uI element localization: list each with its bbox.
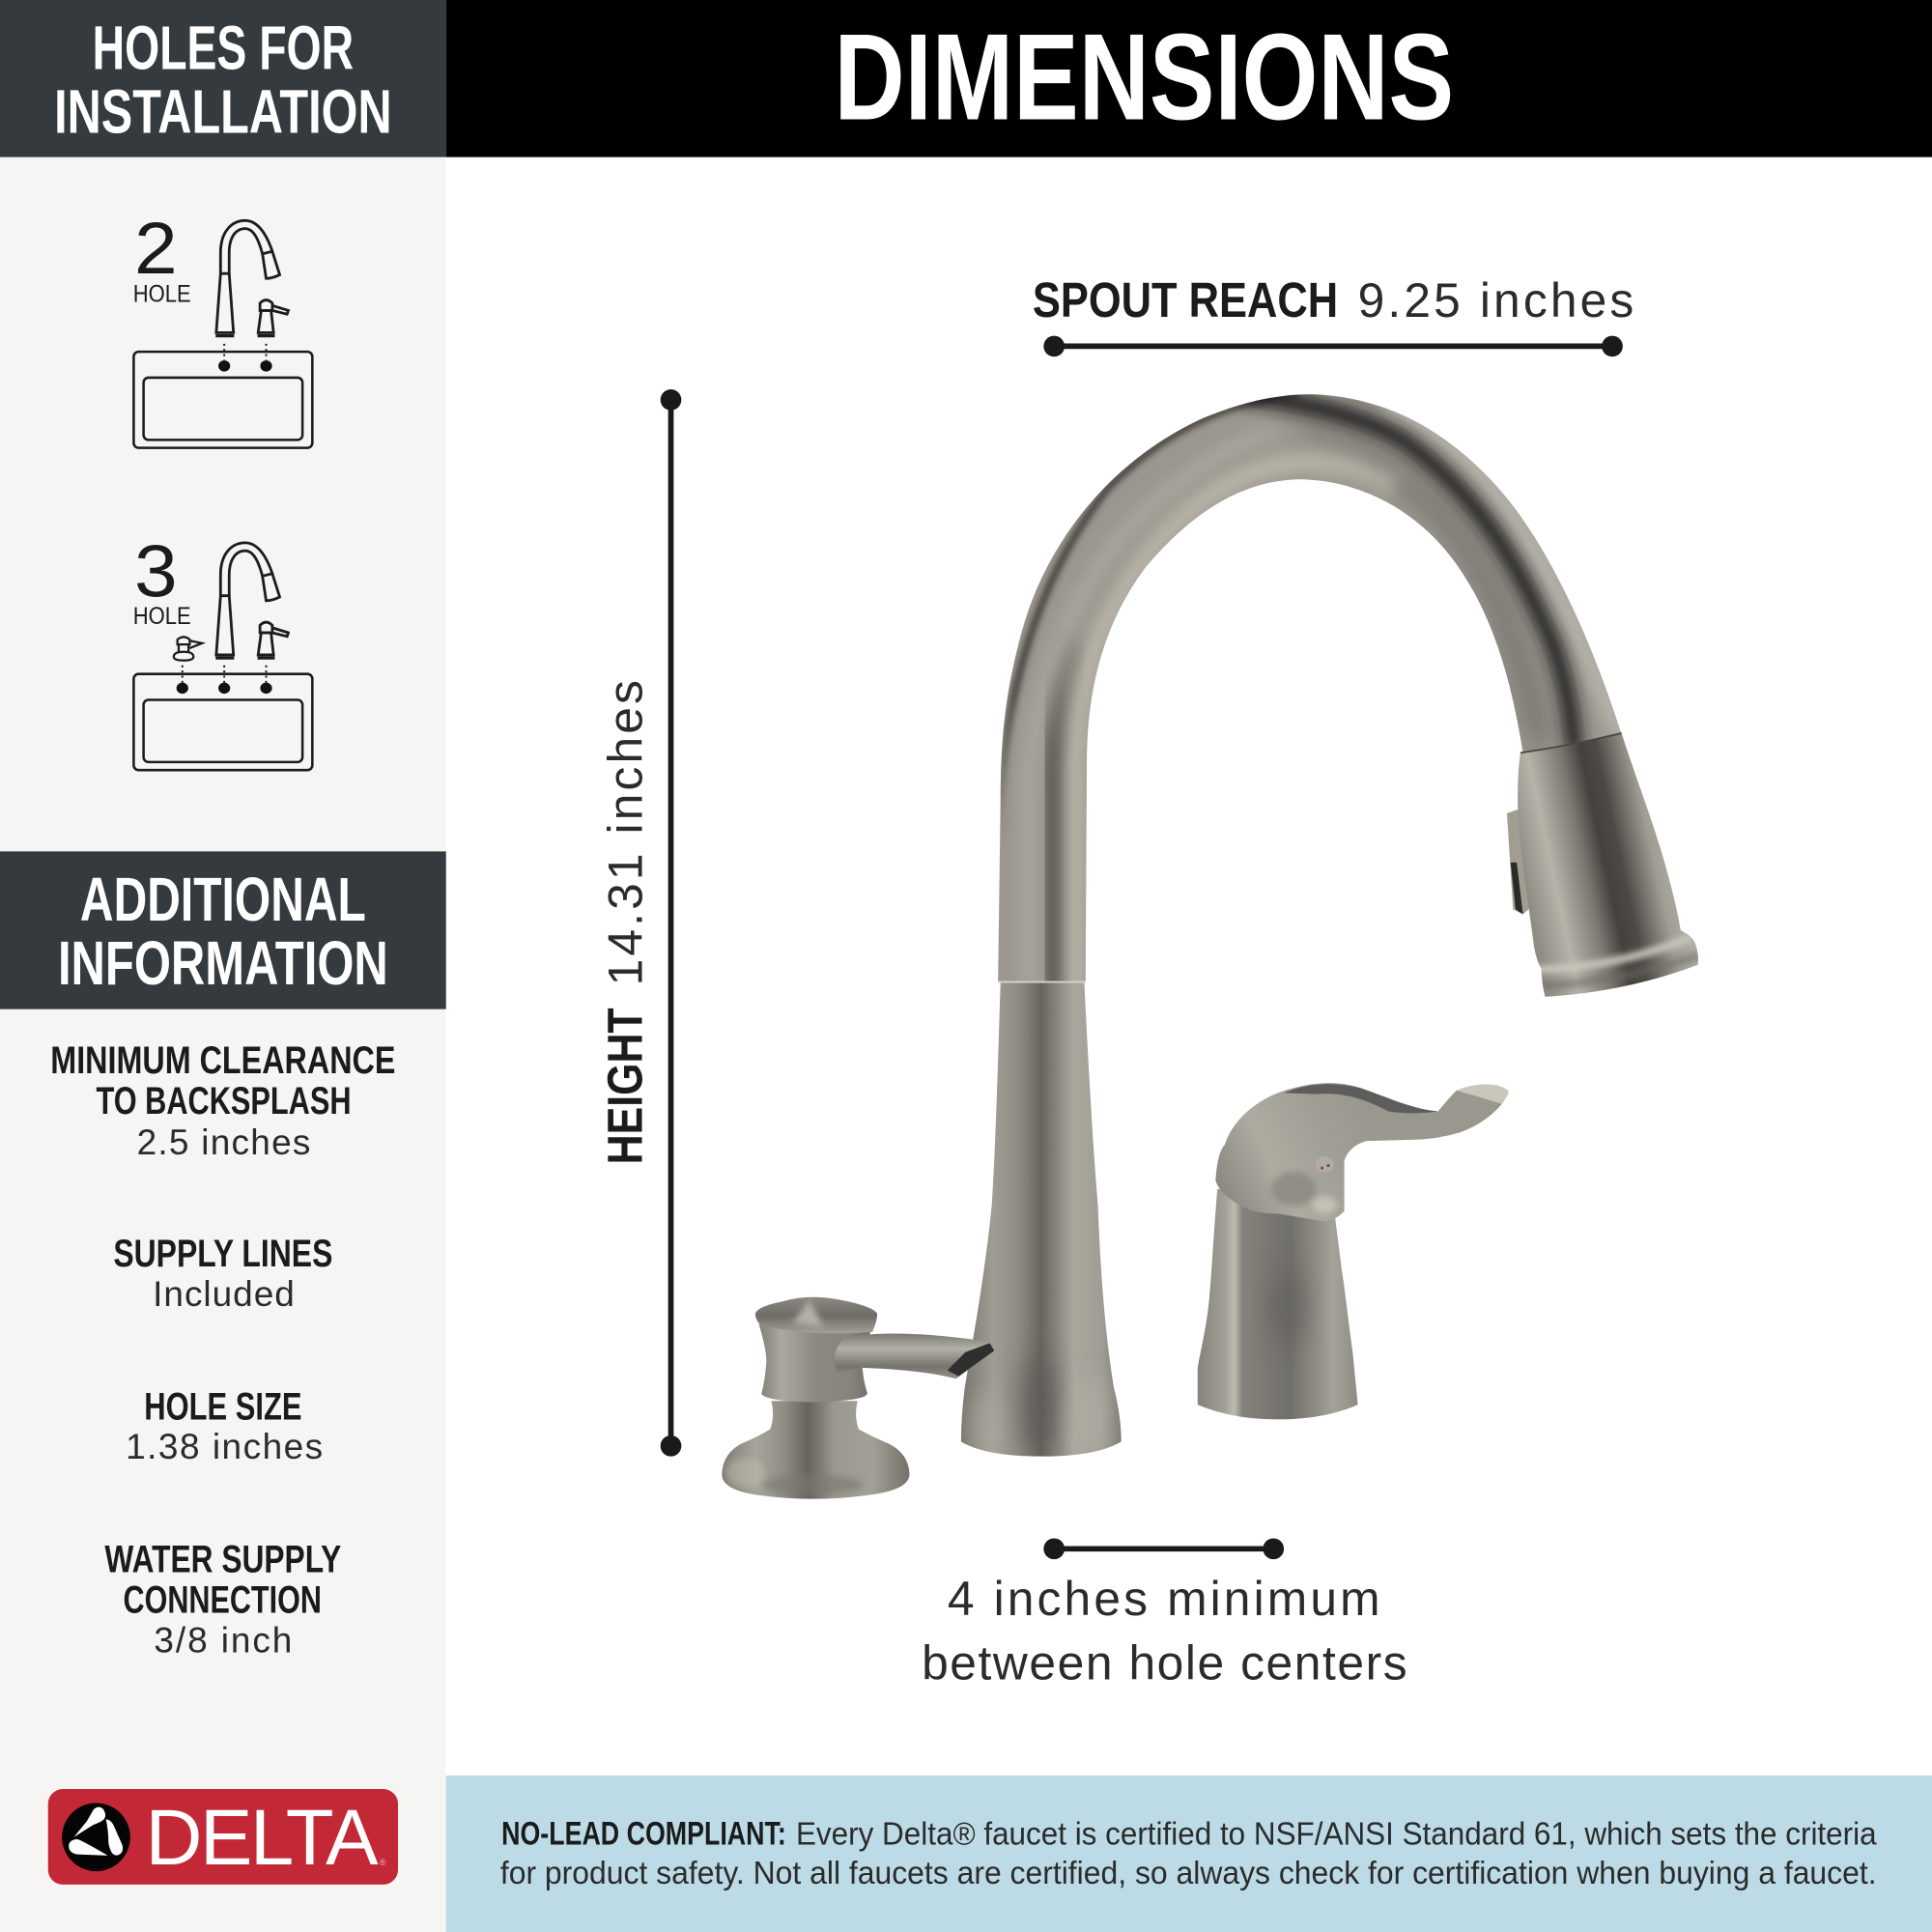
icon: 2 hole installation: HOLE	[133, 280, 191, 307]
dimension: spout reach: SPOUT REACH	[1033, 272, 1338, 327]
footer note: no-lead compliant: for product safety. Not all faucets are certified, so always check for certification when buying a faucet.	[500, 1856, 1877, 1891]
info: hole size	[126, 1385, 323, 1466]
header: holes for installation: HOLES FOR	[93, 13, 354, 82]
logo: delta: DELTA	[146, 1794, 379, 1882]
sidebar panel	[0, 0, 446, 1932]
info: supply lines: SUPPLY LINES	[113, 1233, 332, 1275]
icon: 2 hole installation: 2	[134, 208, 178, 290]
header: holes for installation: INSTALLATION	[54, 77, 392, 147]
info: minimum clearance: MINIMUM CLEARANCE	[50, 1039, 395, 1082]
info: water supply connection	[104, 1539, 341, 1660]
info: water supply connection: WATER SUPPLY	[104, 1539, 341, 1581]
soap dispenser	[722, 1297, 994, 1499]
icon: 3 hole installation: HOLE	[133, 603, 191, 630]
footer note: no-lead compliant: Every Delta® faucet is certified to NSF/ANSI Standard 61, which sets the criteria	[796, 1816, 1877, 1852]
info: minimum clearance: 2.5 inches	[137, 1122, 310, 1162]
icon: 2 hole installation	[133, 208, 312, 448]
info: supply lines	[113, 1233, 332, 1314]
info: water supply connection: CONNECTION	[124, 1579, 322, 1622]
product photo: faucet	[722, 394, 1700, 1499]
logo: delta	[48, 1789, 398, 1885]
footer note: no-lead compliant: NO-LEAD COMPLIANT:	[501, 1815, 786, 1852]
dimension: hole spacing: 4 inches minimum	[948, 1572, 1380, 1626]
header: additional information: ADDITIONAL	[80, 865, 366, 934]
faucet gooseneck spout	[998, 394, 1624, 998]
icon: 3 hole installation	[133, 530, 312, 770]
footer note: no-lead compliant	[446, 1776, 1932, 1932]
dimension: spout reach	[1033, 272, 1634, 356]
info: minimum clearance: TO BACKSPLASH	[96, 1080, 352, 1122]
spray head	[1507, 733, 1700, 997]
faucet lower stem	[961, 982, 1122, 1466]
logo: delta: ®	[380, 1858, 386, 1867]
dimension: hole spacing	[922, 1538, 1407, 1690]
info: water supply connection: 3/8 inch	[154, 1620, 292, 1660]
info: hole size: HOLE SIZE	[144, 1385, 301, 1428]
icon: 3 hole installation: 3	[134, 530, 178, 612]
header: additional information	[0, 851, 446, 1009]
title bar: dimensions	[446, 0, 1932, 157]
single handle valve	[1198, 1083, 1509, 1419]
dimension: hole spacing: between hole centers	[922, 1636, 1407, 1690]
title bar: dimensions: DIMENSIONS	[835, 10, 1454, 147]
header: additional information: INFORMATION	[58, 928, 388, 998]
info: supply lines: Included	[153, 1274, 295, 1314]
info: minimum clearance	[50, 1039, 395, 1162]
header: holes for installation	[0, 0, 446, 157]
dimension: height: 14.31 inches	[599, 680, 653, 985]
dimension: height: HEIGHT	[598, 1008, 653, 1164]
dimension: spout reach: 9.25 inches	[1358, 273, 1634, 327]
info: hole size: 1.38 inches	[126, 1427, 323, 1466]
dimension: height	[598, 389, 681, 1457]
